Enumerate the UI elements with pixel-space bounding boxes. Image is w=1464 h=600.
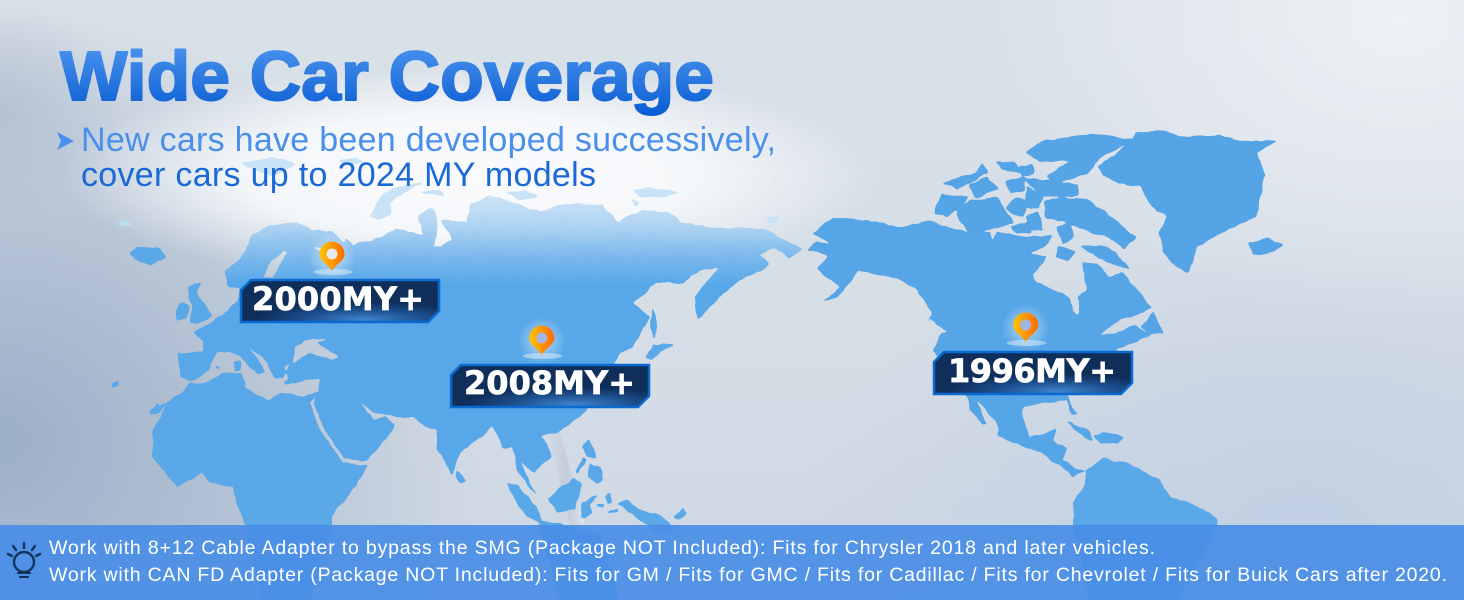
label badge: 1996MY+	[948, 352, 1116, 390]
map: Caribbean islands	[1068, 422, 1122, 443]
background streak	[548, 432, 585, 525]
subtitle	[57, 121, 776, 194]
note line one: Work with 8+12 Cable Adapter to bypass the SMG (Package NOT Included): Fits for Chrysler 2018 and later vehicles.	[49, 537, 1155, 559]
map: South America	[1073, 458, 1217, 600]
map: Iceland and North Atlantic islands	[111, 247, 213, 414]
map: Europe and Asia	[178, 195, 802, 498]
subtitle line one: New cars have been developed successively,	[81, 121, 776, 159]
marker: 2008MY+	[451, 317, 649, 407]
label badge: 2000MY+	[252, 280, 424, 318]
map: Mediterranean islands	[214, 360, 291, 383]
map: Iceland east	[1248, 238, 1283, 255]
map: Japan and Southeast Asia islands	[456, 307, 687, 600]
map: Baja California	[968, 395, 987, 425]
heading: Wide Car Coverage	[60, 37, 714, 115]
map: Africa	[152, 372, 368, 600]
map: northern Russian islands	[240, 157, 779, 223]
icon: light bulb	[8, 543, 40, 577]
map: pale Atlantic island	[118, 221, 132, 227]
map: North America	[807, 218, 1152, 477]
icon: location pin	[1002, 304, 1050, 352]
footer note bar	[0, 525, 1464, 600]
marker: 1996MY+	[934, 304, 1132, 394]
marker: 2000MY+	[241, 233, 439, 322]
icon: location pin	[308, 233, 356, 281]
map: Greenland	[1097, 130, 1277, 273]
label badge: 2008MY+	[464, 364, 635, 402]
note line two: Work with CAN FD Adapter (Package NOT Included): Fits for GM / Fits for GMC / Fits for Cadillac / Fits for Chevrolet / Fits for Buick Cars after 2020.	[49, 564, 1447, 586]
subtitle line two: cover cars up to 2024 MY models	[81, 156, 596, 194]
map: Canadian Arctic islands	[935, 135, 1162, 333]
icon: location pin	[518, 317, 566, 365]
icon: arrow bullet	[57, 132, 74, 150]
world map	[111, 130, 1283, 600]
